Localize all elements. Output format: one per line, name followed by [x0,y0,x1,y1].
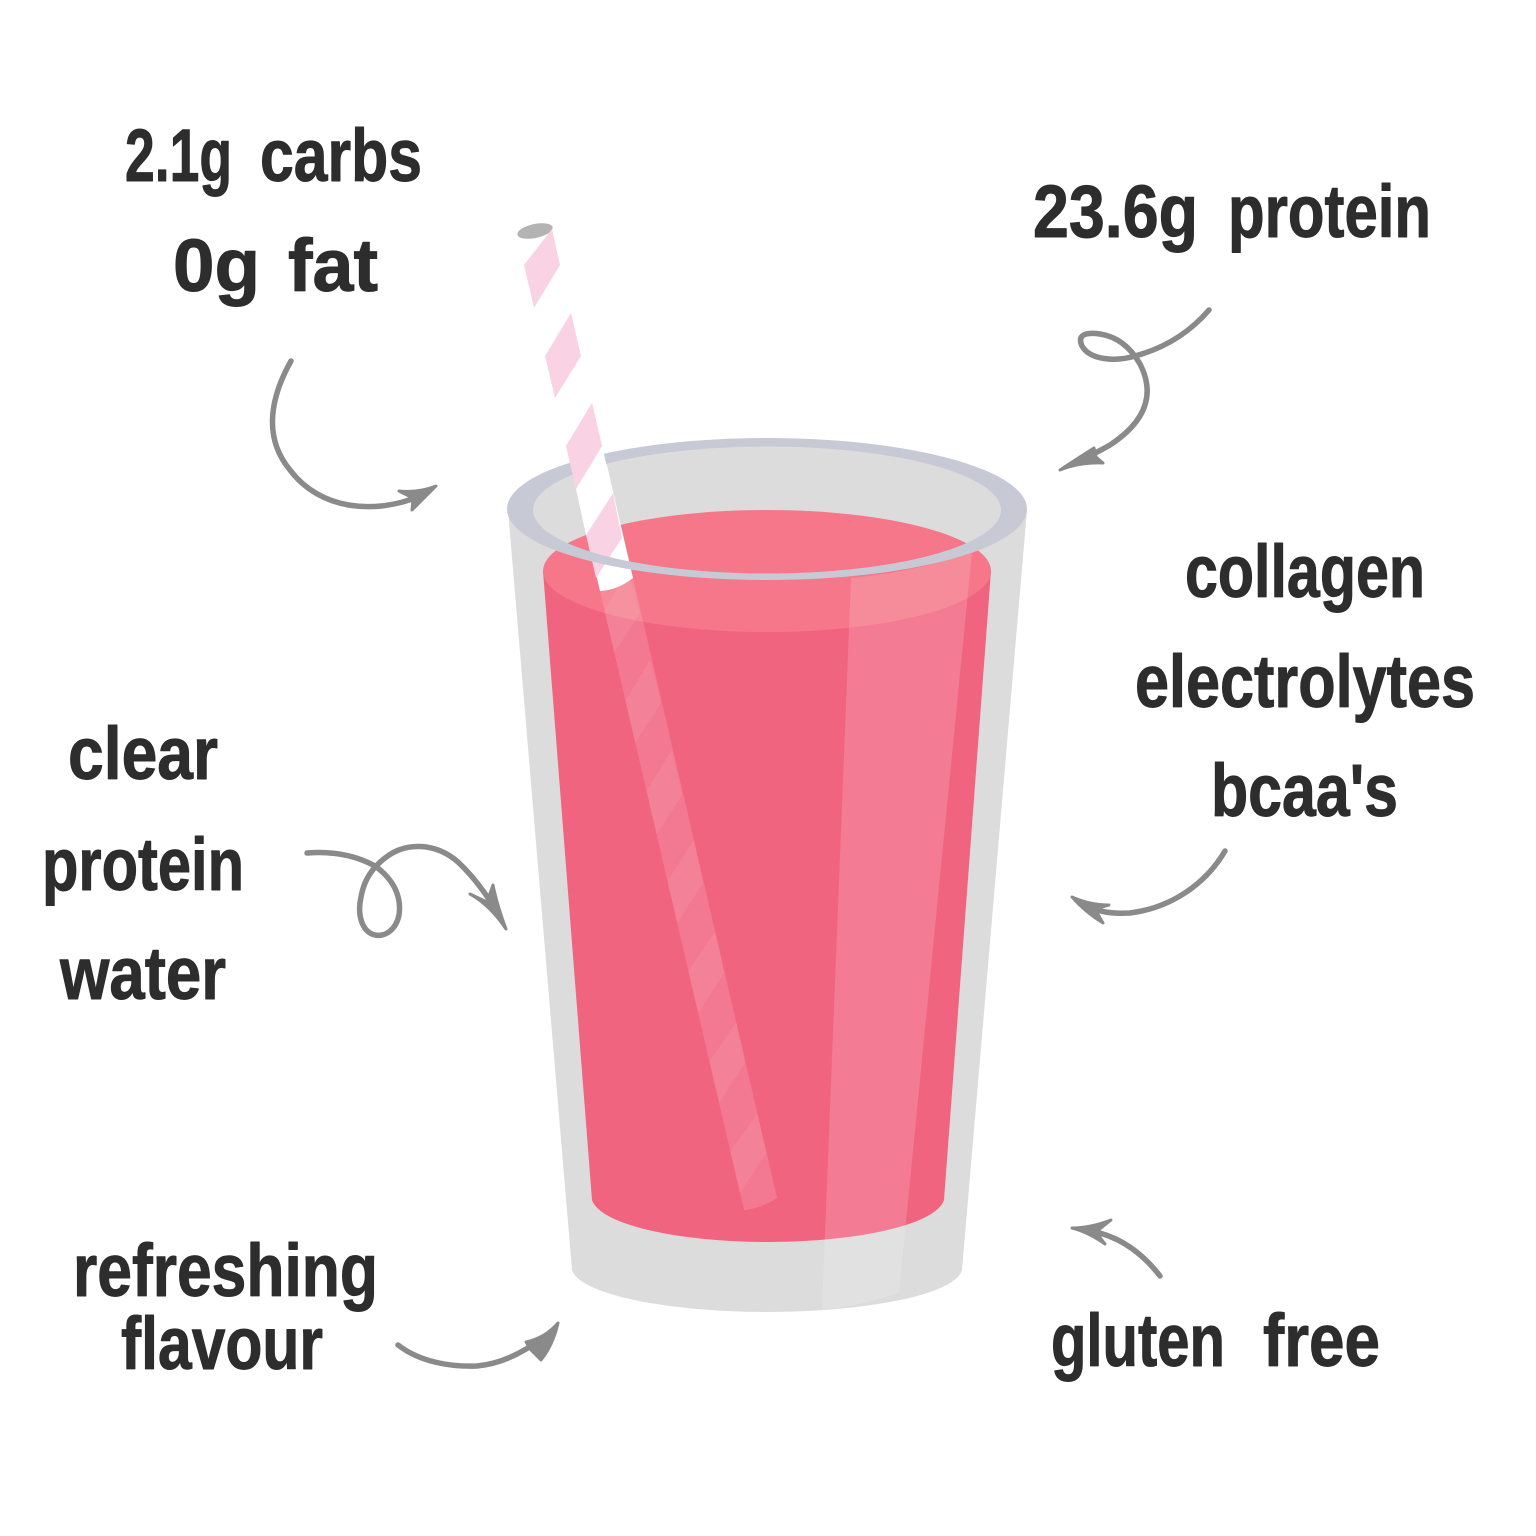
label: carbs and fat: 2.1g [125,114,232,197]
head [1072,1220,1111,1244]
label: gluten free: gluten [1051,1299,1225,1382]
shaft [1085,851,1225,913]
overlap pink section [566,403,602,489]
label: clear protein water: protein [42,823,244,906]
glass inner back wall [531,446,1003,574]
overlap white section [576,446,613,535]
label: refreshing flavour: refreshing [73,1229,378,1312]
label: protein: protein [1228,170,1431,253]
label: carbs and fat: 0g [173,224,260,307]
label: protein: 23.6g [1033,170,1198,253]
straw top opening [516,220,554,242]
glass reflection highlight [822,552,972,1310]
arrow: collagen to glass [1072,851,1225,923]
head [1060,448,1103,470]
illustration: glass of pink drink with straw [507,220,1027,1312]
label: collagen, electrolytes, bcaa's: electrolytes [1135,640,1475,723]
label: collagen, electrolytes, bcaa's: collagen [1185,530,1425,613]
label: clear protein water [42,712,244,1015]
head [1072,897,1109,923]
liquid surface [543,510,991,632]
head [526,1323,558,1360]
arrow: refreshing flavour to glass [398,1323,558,1366]
label: collagen, electrolytes, bcaa's [1135,530,1475,832]
submerged straw stripes [606,614,766,1192]
liquid body [543,571,991,1242]
shaft [307,846,497,935]
shaft [1085,1230,1160,1276]
straw overlap on back rim [566,403,613,535]
shaft [272,361,420,507]
straw upper section [516,220,633,591]
label: refreshing flavour: flavour [121,1302,323,1385]
label: carbs and fat [125,114,422,307]
label: gluten free: free [1263,1299,1380,1382]
head [399,486,436,510]
label: clear protein water: clear [68,712,218,795]
glass rim [507,438,1027,580]
arrow: carbs to glass [272,361,436,510]
arrow: protein to glass [1060,310,1209,470]
label: protein [1033,170,1431,253]
head [470,885,506,929]
label: gluten free [1051,1299,1380,1382]
arrow: clear protein water to glass [307,846,506,935]
label: carbs and fat: carbs [260,114,422,197]
shaft [1075,310,1209,463]
straw white tube [516,227,633,591]
label: refreshing flavour [73,1229,378,1385]
straw submerged section [600,578,777,1210]
arrow: gluten free to glass [1072,1220,1160,1276]
label: collagen, electrolytes, bcaa's: bcaa's [1211,749,1398,832]
straw pink stripes [524,229,622,578]
label: clear protein water: water [59,932,226,1015]
submerged straw tube [600,578,777,1210]
label: carbs and fat: fat [288,224,378,307]
glass body [508,510,1027,1312]
shaft [398,1336,545,1366]
